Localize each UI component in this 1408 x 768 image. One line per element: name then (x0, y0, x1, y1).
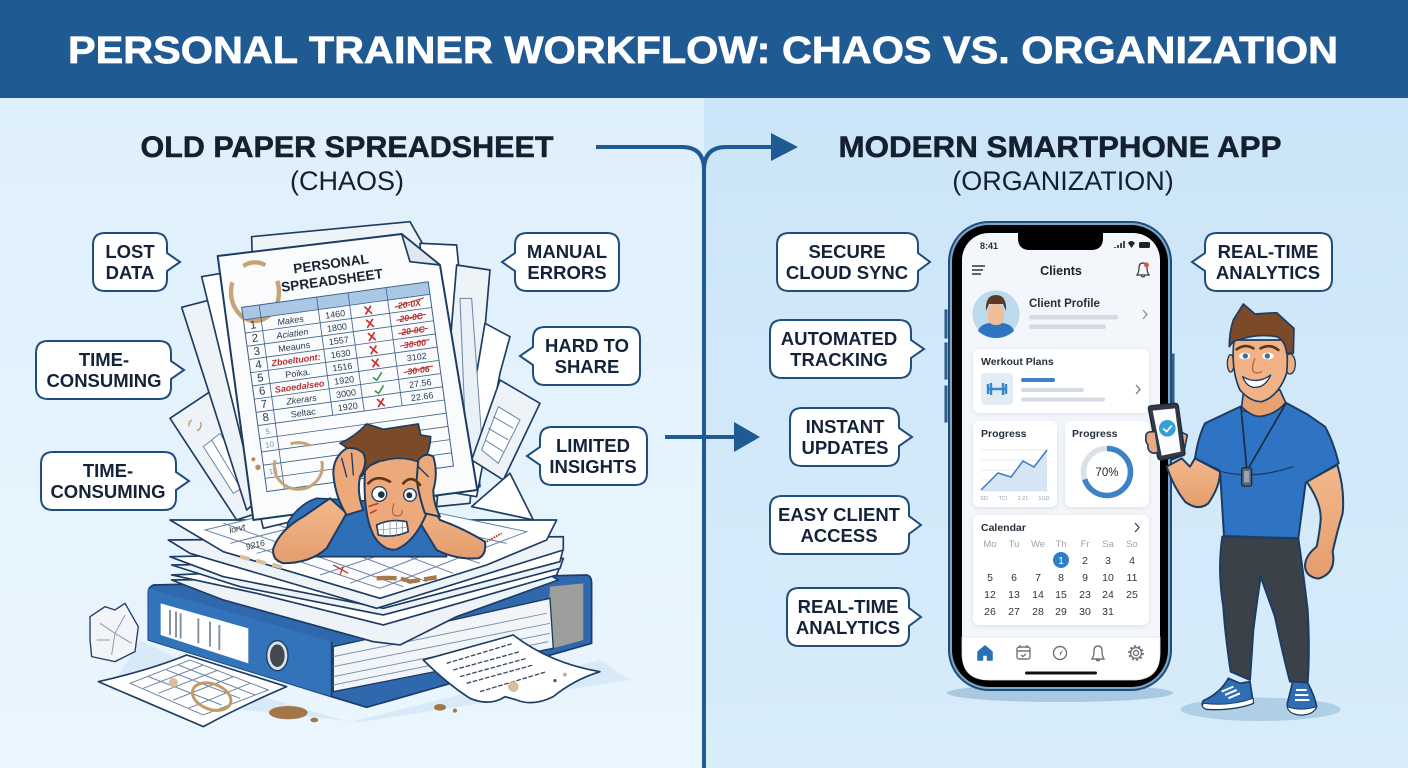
icon: gear (1129, 646, 1143, 660)
callout: secure cloud sync: SECURE (808, 241, 886, 262)
card: calendar: 4 (1129, 555, 1135, 567)
shirt (280, 498, 447, 557)
binder label (161, 603, 248, 663)
card: calendar: 26 (984, 606, 996, 618)
table: 7 (260, 398, 268, 411)
table (242, 282, 453, 492)
card: progress line chart: Progress (981, 428, 1027, 440)
callout: real-time analytics right: REAL-TIME (1218, 241, 1318, 262)
table: 1630 (330, 348, 351, 360)
card: calendar: 11 (1127, 572, 1138, 584)
leggings (1220, 537, 1309, 683)
coffee spills (269, 704, 457, 722)
title: PERSONAL TRAINER WORKFLOW: CHAOS VS. ORGANIZATION (68, 30, 1338, 72)
face features (368, 478, 420, 537)
table: 30-00 (403, 337, 427, 350)
callout: easy client access: EASY CLIENT (778, 504, 901, 525)
paper stack: lorvt (228, 521, 247, 535)
handwritten note (423, 635, 600, 703)
hair (1229, 304, 1294, 353)
card: calendar: 3 (1105, 555, 1111, 567)
binder shadow (110, 640, 630, 722)
heading: modern smartphone app (838, 131, 1282, 196)
right arm (1305, 465, 1343, 579)
trainer (1146, 304, 1343, 721)
card: calendar: Mo (983, 539, 997, 550)
binder ring hole (267, 641, 288, 671)
table: 1920 (337, 401, 358, 413)
card: calendar: 13 (1008, 589, 1020, 601)
callout: limited insights: INSIGHTS (549, 456, 637, 477)
card: calendar: 29 (1055, 606, 1067, 618)
callout: time-consuming 2: CONSUMING (50, 481, 166, 502)
callout: limited insights (527, 427, 647, 485)
card: calendar: Th (1055, 539, 1067, 550)
table: 20-0C (400, 324, 426, 337)
table: Zboeltuont: (270, 352, 321, 369)
card: calendar: 25 (1126, 589, 1138, 601)
status bar (980, 241, 1150, 251)
table: 3000 (335, 387, 357, 400)
phone body (949, 222, 1171, 690)
card: calendar: Tu (1009, 539, 1019, 550)
card: calendar: 15 (1055, 589, 1067, 601)
table: 2 (251, 332, 259, 345)
card: progress line chart: SD (980, 496, 988, 502)
callout: real-time analytics left: REAL-TIME (798, 596, 898, 617)
callout: lost data (93, 233, 180, 291)
table: 6 (258, 385, 266, 398)
notch (1018, 233, 1103, 250)
table: 1516 (332, 361, 353, 374)
card: progress line chart: 1:21 (1018, 496, 1028, 502)
table: 30-06 (407, 364, 430, 377)
card: workout plans: Werkout Plans (981, 356, 1054, 368)
card: calendar: 7 (1035, 572, 1041, 584)
icon: dumbbell (988, 383, 1006, 395)
callout: hard to share: SHARE (555, 356, 619, 377)
shirt (1195, 403, 1339, 538)
callout: easy client access (770, 496, 921, 554)
card: calendar: 27 (1008, 606, 1020, 618)
table: 8 (262, 412, 270, 424)
callout: time-consuming 2 (41, 452, 189, 510)
status bar: 8:41 (980, 241, 998, 251)
phone side buttons (945, 310, 1174, 422)
table: Meauns (278, 340, 311, 354)
card: calendar: 8 (1058, 572, 1064, 584)
callout: limited insights: LIMITED (556, 435, 630, 456)
client profile (972, 290, 1147, 338)
page corner fold (402, 234, 440, 265)
card: calendar: 14 (1032, 589, 1044, 601)
coffee ring bottom (274, 443, 322, 489)
sheet title: SPREADSHEET (280, 266, 384, 295)
callout: manual errors: MANUAL (527, 241, 607, 262)
card: calendar: 6 (1011, 572, 1017, 584)
card: progress donut (1065, 421, 1149, 507)
table: 20-0X (396, 298, 423, 311)
table: 3102 (406, 351, 427, 363)
table: 1460 (325, 308, 346, 321)
panel: left background (0, 98, 704, 768)
icon: home (978, 646, 992, 660)
ground shadow (1181, 698, 1341, 721)
card: calendar: 10 (1102, 572, 1114, 584)
card: calendar: So (1126, 539, 1138, 550)
table: Seltac (290, 406, 317, 420)
face (1233, 340, 1287, 402)
neck (1242, 390, 1286, 416)
callout: time-consuming 2: TIME- (83, 460, 133, 481)
paper stack: 9216 (245, 538, 266, 552)
hair (340, 424, 431, 477)
smartphone (945, 222, 1174, 690)
features (1237, 346, 1278, 387)
callout: real-time analytics right: ANALYTICS (1216, 262, 1320, 283)
phone shadow (947, 684, 1173, 702)
heading: modern smartphone app: (ORGANIZATION) (952, 166, 1174, 196)
sheet title (280, 251, 384, 295)
table: Aciatien (275, 327, 309, 341)
main spreadsheet page (218, 234, 477, 520)
table: 27.56 (408, 377, 432, 390)
callout: instant updates: INSTANT (806, 416, 885, 437)
card: calendar: 23 (1079, 589, 1091, 601)
heading: modern smartphone app: MODERN SMARTPHONE APP (838, 131, 1282, 164)
callout: real-time analytics right (1192, 233, 1332, 291)
callout: automated tracking (770, 320, 924, 378)
card: calendar: 31 (1102, 606, 1114, 618)
bottom nav (962, 637, 1160, 680)
table: Saoedalseo (274, 378, 326, 395)
lanyard and tag (1241, 403, 1286, 486)
card: calendar: 30 (1079, 606, 1091, 618)
card: calendar: 12 (984, 589, 996, 601)
arrow: middle (665, 422, 760, 452)
callout: time-consuming 1: TIME- (79, 349, 129, 370)
card: calendar: We (1031, 539, 1045, 550)
card: calendar: 5 (987, 572, 993, 584)
callout: secure cloud sync: CLOUD SYNC (786, 262, 908, 283)
table: 3 (253, 346, 261, 358)
callout: easy client access: ACCESS (800, 525, 878, 546)
callout: time-consuming 1: CONSUMING (46, 370, 162, 391)
table: 5 (257, 372, 264, 385)
card: calendar: Sa (1102, 539, 1115, 550)
table: 1557 (328, 334, 349, 347)
callout: manual errors: ERRORS (527, 262, 607, 283)
table: 20-0C (398, 311, 424, 324)
icon: bell (1092, 646, 1104, 660)
app header (972, 262, 1149, 278)
callout: time-consuming 1 (36, 341, 184, 399)
arms (273, 498, 347, 563)
callout: instant updates (790, 408, 912, 466)
card: calendar: 28 (1032, 606, 1044, 618)
table: 1920 (334, 374, 355, 387)
callout: real-time analytics left (787, 588, 921, 646)
card: progress donut: 70% (1095, 467, 1119, 479)
icon: compass (1054, 646, 1066, 660)
heading: old paper spreadsheet (140, 131, 554, 196)
header bar (0, 0, 1408, 98)
table: Poika. (285, 367, 311, 380)
binder (148, 575, 592, 707)
home indicator (1025, 672, 1097, 674)
loose spreadsheet on floor (98, 655, 287, 727)
arrow: top connector with divider (596, 133, 798, 768)
head (365, 456, 430, 550)
table: 13 (268, 466, 279, 476)
card: calendar: Fr (1081, 539, 1089, 550)
card: calendar: 1 (1058, 555, 1064, 567)
callout: manual errors (502, 233, 619, 291)
card: progress line chart: TCI (999, 496, 1008, 502)
callout: lost data: DATA (106, 262, 154, 283)
table: 1800 (326, 321, 348, 334)
card: workout plans (973, 349, 1149, 413)
table: Makes (277, 314, 305, 327)
card: calendar: 24 (1102, 589, 1114, 601)
callout: automated tracking: AUTOMATED (781, 328, 897, 349)
callout: real-time analytics left: ANALYTICS (796, 617, 900, 638)
table: 5 (265, 427, 271, 437)
ears (1227, 355, 1234, 372)
table: 1 (249, 319, 257, 332)
screen (962, 233, 1160, 680)
callout: lost data: LOST (105, 241, 155, 262)
table: 22.66 (410, 390, 434, 403)
callout: hard to share: HARD TO (545, 335, 629, 356)
held phone (1146, 403, 1187, 460)
card: calendar (973, 515, 1149, 625)
client profile: Client Profile (1029, 298, 1100, 310)
right shoe (1287, 682, 1317, 715)
callout: secure cloud sync (777, 233, 930, 291)
stressed man (273, 424, 485, 563)
card: progress donut: Progress (1072, 428, 1118, 440)
crumpled paper (90, 603, 138, 662)
back sheets (170, 222, 540, 528)
raised arm (1167, 458, 1220, 507)
coffee ring top (231, 262, 279, 321)
card: progress line chart: 1GD (1038, 496, 1050, 502)
hands (333, 448, 365, 515)
heading: old paper spreadsheet: (CHAOS) (290, 166, 404, 196)
callout: hard to share (520, 327, 640, 385)
heading: old paper spreadsheet: OLD PAPER SPREADSHEET (140, 131, 554, 164)
paper stack (168, 513, 563, 645)
icon: calendar (1017, 645, 1030, 659)
card: calendar: 2 (1082, 555, 1088, 567)
left shoe (1202, 678, 1253, 709)
panel: right background (704, 98, 1408, 768)
card: calendar: Calendar (981, 522, 1026, 534)
card: calendar: 9 (1082, 572, 1088, 584)
sheet title: PERSONAL (292, 251, 370, 276)
table: 4 (255, 359, 263, 372)
table: 10 (265, 440, 275, 450)
card: progress line chart (973, 421, 1057, 507)
table: Zkerars (285, 393, 318, 407)
illustration: paper chaos (90, 222, 630, 727)
app header: Clients (1040, 264, 1082, 278)
callout: automated tracking: TRACKING (790, 349, 888, 370)
callout: instant updates: UPDATES (801, 437, 889, 458)
